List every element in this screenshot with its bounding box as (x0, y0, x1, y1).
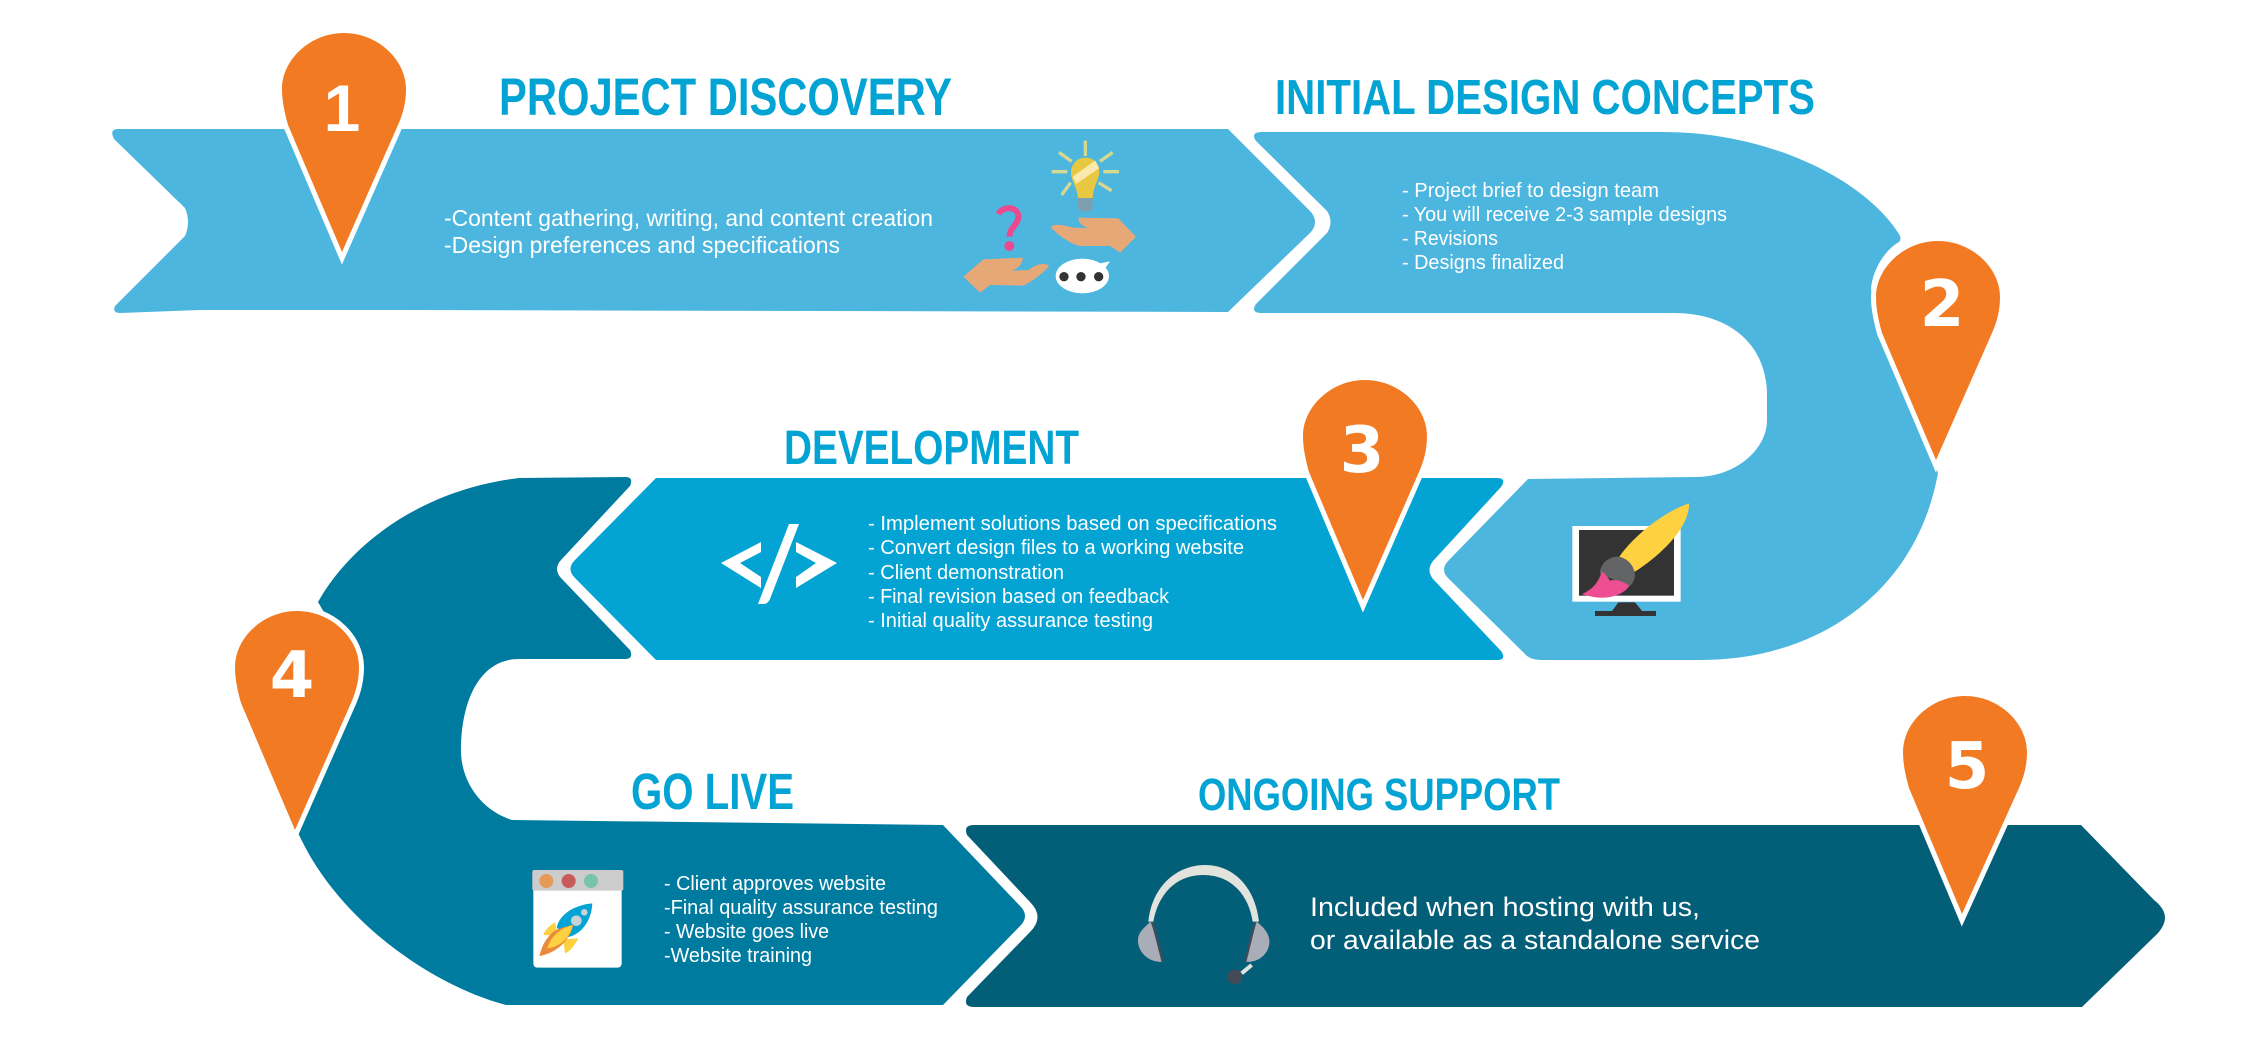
panel: step 5 ongoing support (966, 769, 2165, 1007)
band: step 1 (112, 129, 1315, 313)
band: step 2 (1254, 132, 1938, 660)
heading: initial design concepts: INITIAL DESIGN CONCEPTS (1275, 71, 1815, 125)
text block: step 2 details: - Revisions (1402, 228, 1498, 250)
text block: step 2 details (1402, 180, 1727, 274)
text block: step 2 details: - Project brief to design team (1402, 180, 1659, 202)
pin 3 (1303, 380, 1427, 600)
panel: step 1 project discovery (112, 68, 1315, 313)
icon: browser window with rocket (532, 870, 623, 968)
icon: headset (1138, 865, 1269, 984)
heading: go live: GO LIVE (631, 763, 794, 820)
pin 1: 1 (324, 71, 360, 145)
icon: hands with idea and question (963, 141, 1136, 293)
text block: step 4 details (664, 873, 938, 967)
heading: ongoing support: ONGOING SUPPORT (1198, 769, 1560, 820)
band: step 5 (966, 825, 2165, 1007)
panel: step 4 go live (296, 477, 1025, 1005)
pin 3: 3 (1340, 414, 1384, 488)
text block: step 5 details (1310, 892, 1760, 955)
text block: step 4 details: - Website goes live (664, 921, 829, 943)
band: step 4 (296, 477, 1025, 1005)
text block: step 1 details (444, 205, 933, 258)
text block: step 2 details: - Designs finalized (1402, 252, 1564, 274)
heading: project discovery: PROJECT DISCOVERY (499, 68, 952, 127)
text block: step 1 details: -Design preferences and specifications (444, 232, 840, 258)
pin 4: 4 (270, 639, 314, 713)
pin 4 (235, 611, 359, 830)
heading: development: DEVELOPMENT (784, 422, 1079, 475)
text block: step 5 details: or available as a standalone service (1310, 925, 1760, 955)
text block: step 2 details: - You will receive 2-3 sample designs (1402, 204, 1727, 226)
text block: step 3 details: - Initial quality assurance testing (868, 610, 1153, 632)
text block: step 4 details: -Website training (664, 945, 812, 967)
text block: step 1 details: -Content gathering, writing, and content creation (444, 205, 933, 231)
text block: step 3 details: - Implement solutions based on specifications (868, 513, 1277, 535)
icon: monitor and paintbrush (1572, 503, 1689, 616)
text block: step 3 details (868, 513, 1277, 632)
icon: code brackets (721, 524, 837, 604)
pin 1 (282, 33, 406, 252)
text block: step 3 details: - Client demonstration (868, 562, 1064, 584)
text block: step 3 details: - Convert design files to a working website (868, 537, 1244, 559)
pin 2 (1876, 241, 2000, 460)
text block: step 4 details: -Final quality assurance testing (664, 897, 938, 919)
panel: step 2 initial design concepts (1254, 71, 1938, 660)
panel: step 3 development (570, 422, 1503, 660)
pin 5 (1903, 696, 2027, 914)
text block: step 5 details: Included when hosting with us, (1310, 892, 1700, 922)
pin 2: 2 (1920, 268, 1964, 342)
text block: step 4 details: - Client approves website (664, 873, 886, 895)
band: step 3 (570, 478, 1503, 660)
text block: step 3 details: - Final revision based on feedback (868, 586, 1170, 608)
pin 5: 5 (1945, 730, 1989, 804)
